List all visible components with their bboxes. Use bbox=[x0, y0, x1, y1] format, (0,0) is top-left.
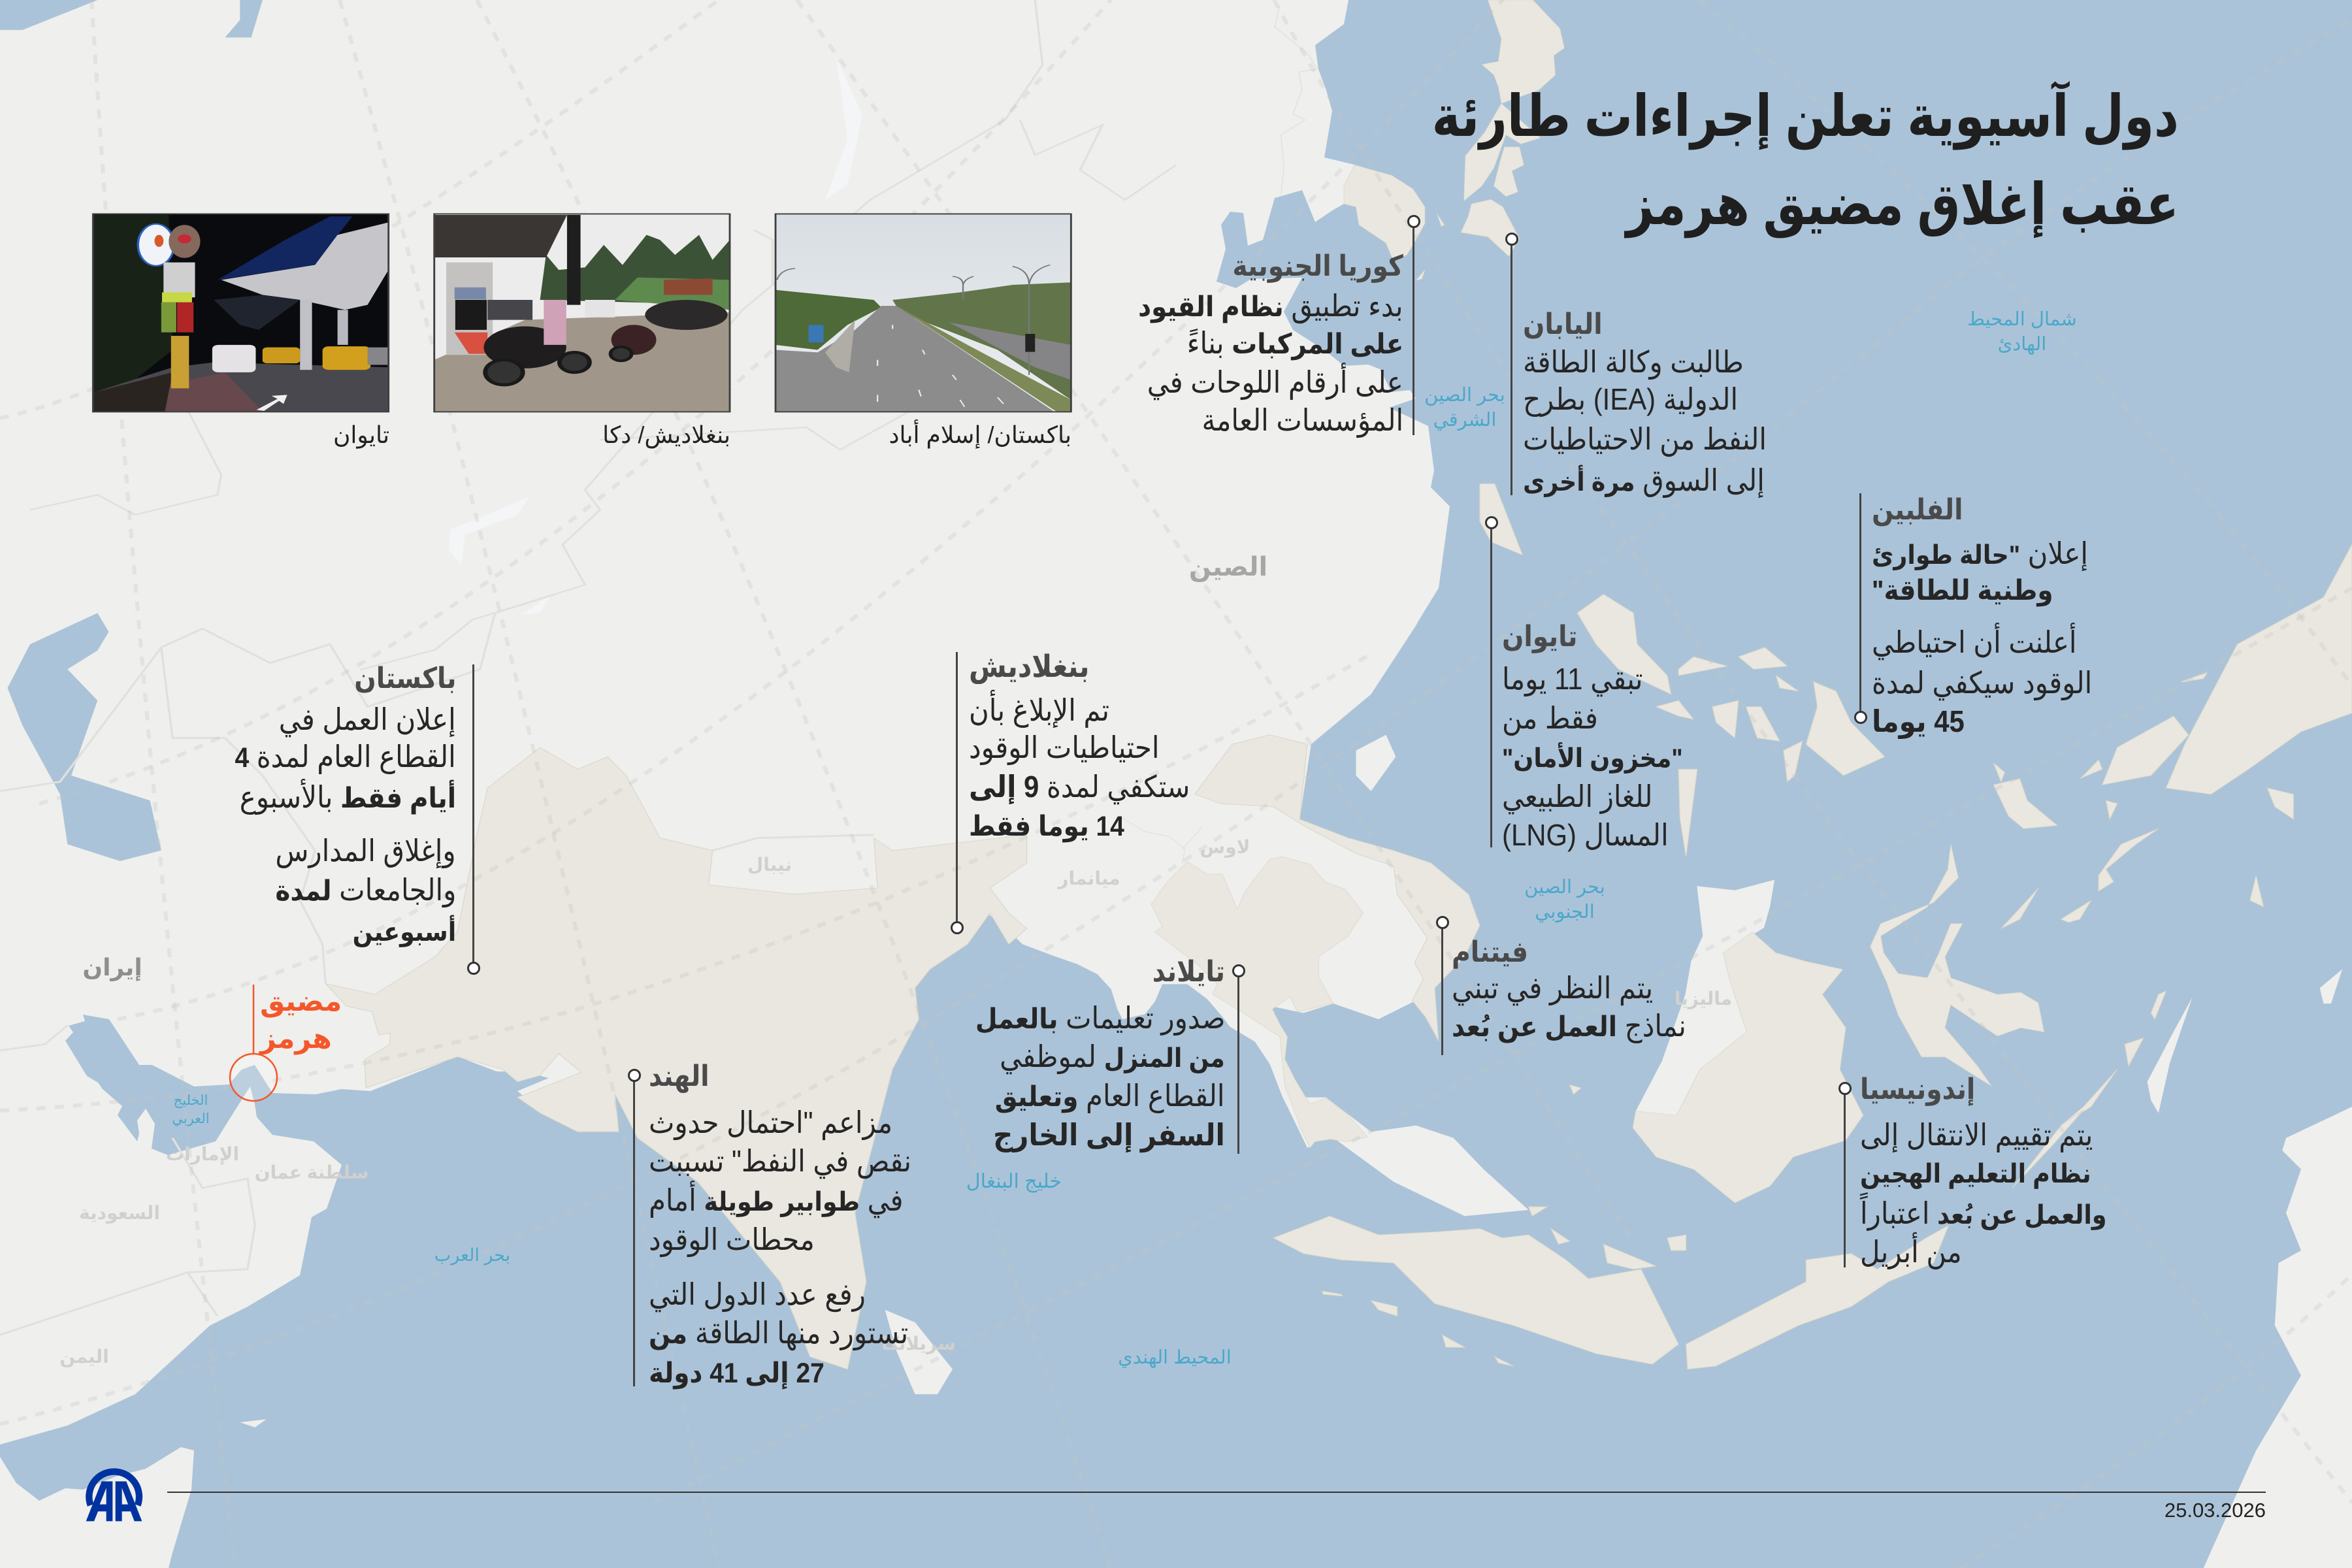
sea label: east china sea: بحر الصين bbox=[1424, 385, 1505, 406]
callout: taiwan: المسال (LNG) bbox=[1502, 818, 1669, 852]
label: saudi arabia: السعودية bbox=[79, 1203, 160, 1223]
callout: philippines: إعلان "حالة طوارئ bbox=[1872, 536, 2088, 570]
title bbox=[1432, 81, 2179, 238]
sea label: bay of bengal: خليج البنغال bbox=[966, 1171, 1062, 1192]
callout: bangladesh bbox=[951, 649, 1190, 934]
callout: india: نقص في النفط" تسببت bbox=[649, 1144, 911, 1178]
heading: indonesia: إندونيسيا bbox=[1860, 1073, 1975, 1105]
callout: bangladesh: ستكفي لمدة 9 إلى bbox=[969, 770, 1190, 804]
photo caption: taiwan: تايوان bbox=[333, 421, 389, 448]
heading: philippines: الفلبين bbox=[1872, 494, 1963, 526]
highlighted land: pakistan india bangladesh bbox=[325, 747, 1027, 1369]
callout: indonesia: والعمل عن بُعد اعتباراً bbox=[1860, 1196, 2107, 1230]
country labels on map: الصين bbox=[1189, 553, 1267, 581]
callout: india: تستورد منها الطاقة من bbox=[649, 1316, 908, 1350]
snow and lake details bbox=[449, 57, 862, 615]
callout: south korea: بدء تطبيق نظام القيود bbox=[1139, 289, 1403, 323]
callout: philippines: أعلنت أن احتياطي bbox=[1872, 625, 2077, 659]
highlighted land: korea and japan bbox=[1344, 0, 1564, 280]
callout: south korea: على المركبات بناءً bbox=[1187, 326, 1403, 360]
callout: pakistan: القطاع العام لمدة 4 bbox=[235, 740, 456, 774]
callout: taiwan bbox=[1485, 516, 1683, 852]
title: عقب إغلاق مضيق هرمز bbox=[1626, 172, 2179, 237]
inland water: caspian and lakes bbox=[0, 0, 263, 861]
photo: pakistan islamabad road bbox=[776, 214, 1071, 412]
callout: indonesia bbox=[1838, 1073, 2107, 1270]
callout: pakistan: أسبوعين bbox=[353, 918, 456, 947]
sea label: east china sea bbox=[1424, 385, 1505, 431]
callout: japan: الدولية (IEA) بطرح bbox=[1523, 382, 1738, 416]
callout: south korea bbox=[1139, 215, 1420, 438]
callout: taiwan: فقط من bbox=[1502, 701, 1598, 735]
callout: pakistan bbox=[235, 662, 480, 975]
callout: philippines bbox=[1854, 493, 2092, 739]
callout: thailand: السفر إلى الخارج bbox=[993, 1118, 1225, 1152]
callout: vietnam: نماذج العمل عن بُعد bbox=[1452, 1009, 1686, 1043]
heading: india: الهند bbox=[649, 1060, 710, 1092]
label: malaysia: ماليزيا bbox=[1674, 988, 1732, 1009]
sea label: indian ocean: المحيط الهندي bbox=[1118, 1347, 1232, 1368]
sea label: north pacific bbox=[1967, 309, 2077, 355]
callout: japan: إلى السوق مرة أخرى bbox=[1523, 463, 1765, 497]
country borders bbox=[0, 0, 1317, 1335]
label: oman: سلطنة عمان bbox=[255, 1162, 368, 1183]
highlighted land: south east asia islands bbox=[1195, 544, 2352, 1369]
sea label: arabian gulf bbox=[172, 1093, 210, 1126]
callout: indonesia: نظام التعليم الهجين bbox=[1860, 1160, 2091, 1188]
heading: japan: اليابان bbox=[1523, 308, 1603, 340]
photo: bangladesh dhaka queue bbox=[434, 214, 730, 412]
photo caption: dhaka: بنغلاديش/ دكا bbox=[602, 421, 730, 448]
photo: taiwan fuel station bbox=[93, 214, 389, 412]
highlighted land: borneo and sulawesi bbox=[1633, 844, 2044, 1203]
heading: taiwan: تايوان bbox=[1502, 621, 1578, 653]
callout: philippines: وطنية للطاقة" bbox=[1872, 575, 2053, 606]
callout: vietnam: يتم النظر في تبني bbox=[1452, 971, 1653, 1005]
callout: bangladesh: تم الإبلاغ بأن bbox=[969, 693, 1109, 727]
photo caption: islamabad: باكستان/ إسلام أباد bbox=[889, 421, 1071, 448]
callout: bangladesh: احتياطيات الوقود bbox=[969, 730, 1160, 764]
heading: thailand: تايلاند bbox=[1152, 956, 1225, 988]
icon: hormuz circle bbox=[230, 1054, 277, 1101]
strait label: hormuz: هرمز bbox=[260, 1023, 332, 1054]
highlighted land: okinawa strip bbox=[1480, 483, 1522, 555]
callout: south korea: على أرقام اللوحات في bbox=[1147, 365, 1403, 399]
sea label: arabian gulf: الخليج bbox=[174, 1093, 208, 1108]
hormuz pointer line bbox=[253, 985, 254, 1054]
callout: indonesia: يتم تقييم الانتقال إلى bbox=[1860, 1118, 2093, 1152]
callout: pakistan: والجامعات لمدة bbox=[275, 873, 456, 907]
label: myanmar: ميانمار bbox=[1058, 868, 1120, 889]
callout: japan bbox=[1505, 233, 1767, 498]
label: iran: إيران bbox=[82, 954, 142, 981]
callout: bangladesh: 14 يوما فقط bbox=[969, 811, 1124, 842]
sea label: arabian gulf: العربي bbox=[172, 1111, 210, 1126]
heading: bangladesh: بنغلاديش bbox=[969, 649, 1089, 683]
label: sri lanka: سريلانكا bbox=[881, 1333, 956, 1354]
callout: india: رفع عدد الدول التي bbox=[649, 1277, 866, 1311]
sea label: north pacific: الهادئ bbox=[1998, 334, 2046, 355]
callout: taiwan: تبقي 11 يوما bbox=[1502, 662, 1643, 696]
callout: vietnam bbox=[1436, 916, 1686, 1055]
sea label: north pacific: شمال المحيط bbox=[1967, 309, 2077, 330]
callout: south korea: المؤسسات العامة bbox=[1201, 403, 1403, 437]
date: 25.03.2026 bbox=[2164, 1499, 2266, 1522]
callout: taiwan: للغاز الطبيعي bbox=[1502, 779, 1652, 813]
strait label: hormuz: مضيق bbox=[260, 986, 342, 1017]
callout: india: مزاعم "احتمال حدوث bbox=[649, 1105, 892, 1139]
heading: south korea: كوريا الجنوبية bbox=[1233, 250, 1403, 282]
callout: thailand: صدور تعليمات بالعمل bbox=[975, 1001, 1225, 1035]
strait label: hormuz bbox=[259, 986, 342, 1054]
label: laos: لاوس bbox=[1200, 837, 1250, 857]
callout: thailand: من المنزل لموظفي bbox=[1000, 1039, 1225, 1073]
label: nepal: نيبال bbox=[747, 855, 792, 875]
callout: india: 27 إلى 41 دولة bbox=[649, 1358, 825, 1389]
callout: thailand: القطاع العام وتعليق bbox=[995, 1079, 1225, 1113]
callout: philippines: 45 يوما bbox=[1872, 704, 1965, 738]
sea label: south china sea bbox=[1524, 877, 1605, 923]
heading: pakistan: باكستان bbox=[354, 662, 456, 694]
callout: pakistan: أيام فقط بالأسبوع bbox=[240, 780, 456, 814]
footer rule bbox=[167, 1492, 2266, 1493]
callout: philippines: الوقود سيكفي لمدة bbox=[1872, 666, 2092, 700]
sea label: arabian sea: بحر العرب bbox=[434, 1245, 510, 1265]
sea label: south china sea: الجنوبي bbox=[1535, 902, 1595, 923]
title: دول آسيوية تعلن إجراءات طارئة bbox=[1432, 84, 2179, 148]
callout: japan: النفط من الاحتياطيات bbox=[1523, 422, 1767, 456]
icon: anadolu agency logo bbox=[86, 1471, 142, 1521]
callout: indonesia: من أبريل bbox=[1860, 1235, 1962, 1269]
label: yemen: اليمن bbox=[59, 1347, 109, 1367]
label: uae: الإمارات bbox=[166, 1144, 239, 1164]
callout: taiwan: "مخزون الأمان" bbox=[1502, 744, 1683, 773]
callout: india: في طوابير طويلة أمام bbox=[649, 1183, 904, 1217]
callout: pakistan: وإغلاق المدارس bbox=[276, 834, 456, 868]
heading: vietnam: فيتنام bbox=[1452, 936, 1528, 968]
highlighted land: thailand bbox=[1151, 857, 1367, 1148]
callout: pakistan: إعلان العمل في bbox=[279, 702, 456, 736]
sea label: east china sea: الشرقي bbox=[1433, 410, 1496, 431]
callout: japan: طالبت وكالة الطاقة bbox=[1523, 345, 1744, 379]
callout: india bbox=[628, 1060, 911, 1389]
sea label: south china sea: بحر الصين bbox=[1524, 877, 1605, 898]
callout: india: محطات الوقود bbox=[649, 1222, 815, 1256]
callout: thailand bbox=[975, 956, 1245, 1154]
